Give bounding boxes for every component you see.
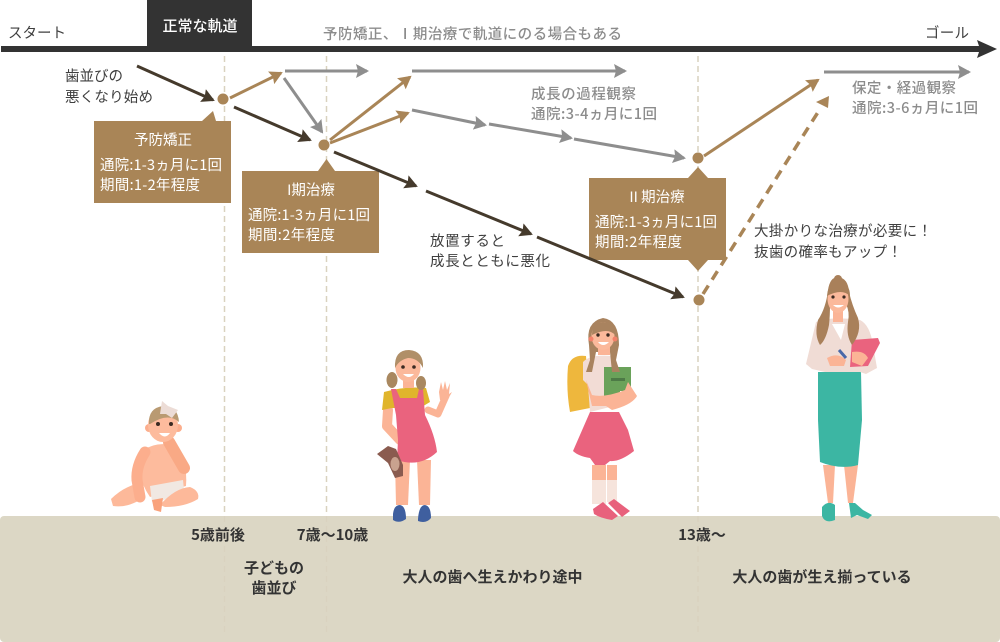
callout: phase I treatment: I期治療 — [287, 179, 335, 200]
callout: phase II treatment: 通院:1-3ヵ月に1回 — [595, 211, 717, 232]
stage: baby teeth — [244, 557, 304, 598]
callout: phase II treatment: 期間:2年程度 — [595, 231, 682, 252]
callout: phase I treatment: 通院:1-3ヵ月に1回 — [248, 204, 370, 225]
arrows: observation path — [284, 71, 969, 158]
arrows: worsening path — [137, 66, 683, 297]
text: growth observation: 成長の過程観察 — [531, 83, 636, 104]
age guide lines — [224, 56, 698, 632]
illustration: school girl with backpack and book — [567, 318, 637, 520]
callout: preventive correction: 通院:1-3ヵ月に1回 — [100, 154, 222, 175]
callout: phase I treatment — [242, 159, 379, 253]
main timeline arrow — [1, 40, 997, 58]
text: major treatment warning — [754, 220, 932, 262]
callout: phase I treatment: 期間:2年程度 — [248, 224, 335, 245]
tab: normal path: 正常な軌道 — [162, 15, 238, 36]
arrows: treatment path — [230, 73, 818, 156]
stage: adult teeth: 大人の歯が生え揃っている — [732, 566, 912, 587]
illustration: baby — [111, 401, 198, 512]
text: worsens if left — [430, 230, 550, 271]
age labels: 13歳〜 — [678, 524, 726, 545]
text: alignment starts to worsen: 悪くなり始め — [65, 86, 153, 107]
text: major treatment warning: 抜歯の確率もアップ！ — [754, 241, 902, 262]
label: start: スタート — [8, 22, 66, 43]
stage: mixed teeth: 大人の歯へ生えかわり途中 — [402, 566, 583, 587]
text: worsens if left: 放置すると — [430, 230, 505, 251]
stage: baby teeth: 子どもの — [244, 557, 304, 578]
text: retention observation: 保定・経過観察 — [852, 77, 956, 98]
illustration: adult woman with notebook — [806, 275, 880, 521]
callout: preventive correction — [94, 111, 231, 203]
text: retention observation — [852, 77, 978, 118]
callout: phase II treatment — [589, 167, 726, 271]
illustration: young girl with teddy bear — [377, 350, 452, 522]
label: back on track note: 予防矯正、Ⅰ期治療で軌道にのる場合もある — [323, 23, 622, 44]
callout: preventive correction: 期間:1-2年程度 — [100, 174, 200, 195]
callout: phase II treatment: II 期治療 — [629, 186, 685, 207]
bottom age panel — [0, 516, 1000, 642]
tab: normal path — [147, 0, 252, 47]
text: alignment starts to worsen — [65, 65, 153, 107]
text: alignment starts to worsen: 歯並びの — [65, 65, 123, 86]
callout: preventive correction: 予防矯正 — [134, 129, 192, 150]
text: major treatment warning: 大掛かりな治療が必要に！ — [754, 220, 932, 241]
text: worsens if left: 成長とともに悪化 — [430, 250, 550, 271]
stage: baby teeth: 歯並び — [251, 577, 297, 598]
age labels: 7歳〜10歳 — [297, 524, 368, 545]
age labels — [191, 524, 726, 545]
text: growth observation — [531, 83, 657, 124]
age labels: 5歳前後 — [191, 524, 245, 545]
arrow: dashed major treatment — [703, 96, 829, 294]
path nodes — [218, 94, 704, 306]
label: goal: ゴール — [925, 22, 969, 43]
text: growth observation: 通院:3-4ヵ月に1回 — [531, 103, 657, 124]
text: retention observation: 通院:3-6ヵ月に1回 — [852, 97, 978, 118]
